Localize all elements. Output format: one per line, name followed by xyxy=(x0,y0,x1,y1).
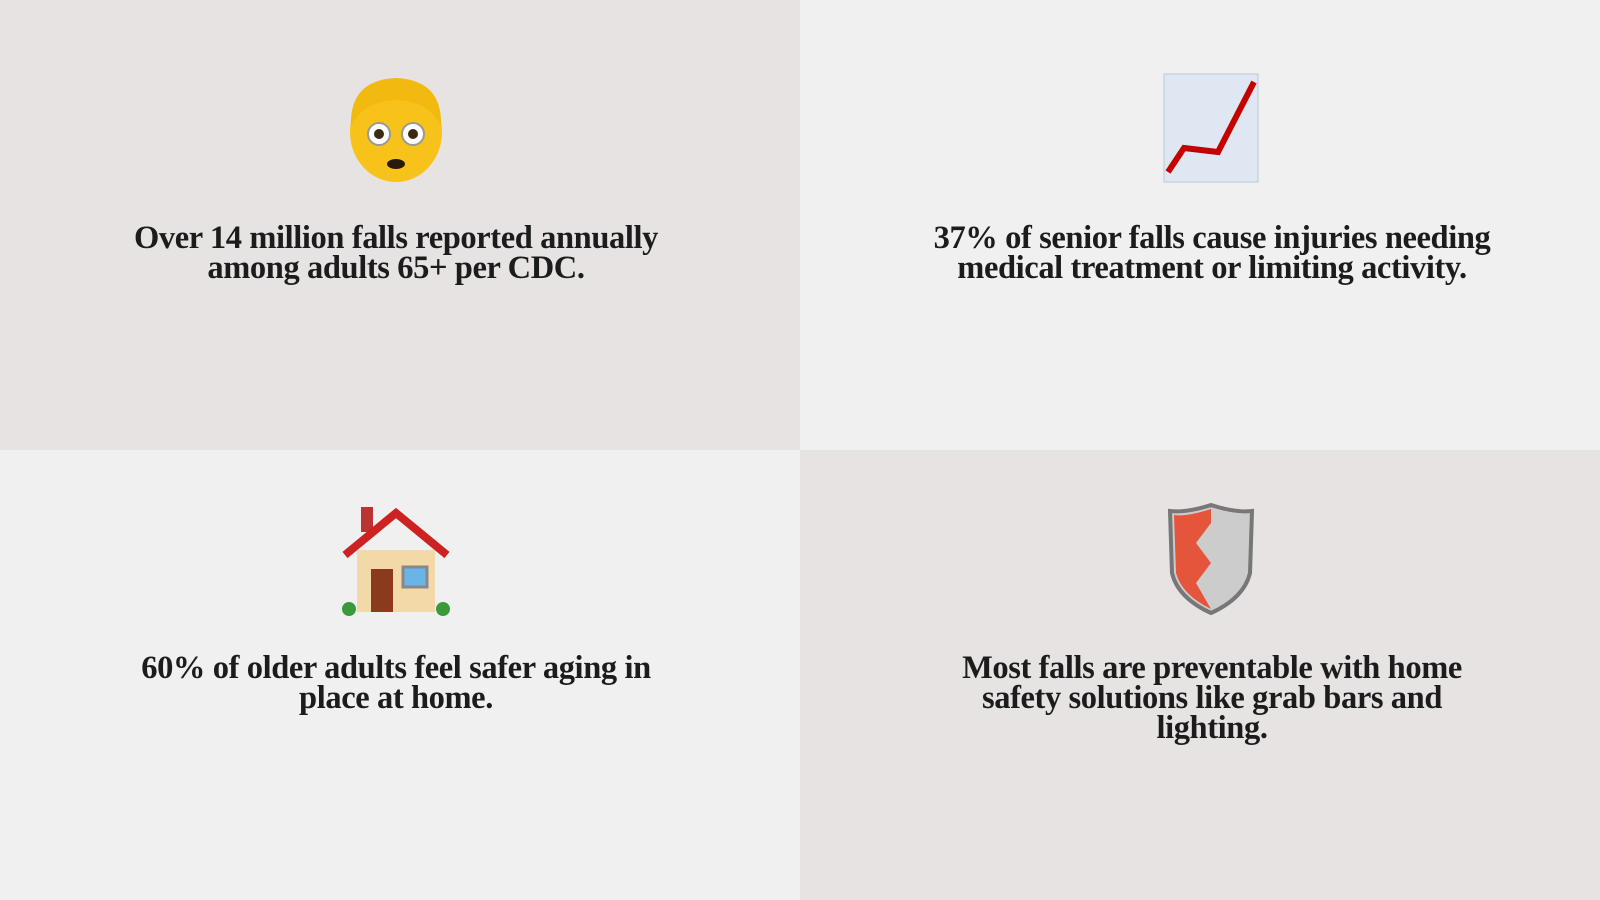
text: Most falls are preventable with home safety solutions like grab bars and lighting. xyxy=(962,650,1462,746)
panel: falls reported xyxy=(0,0,800,450)
panel: preventable xyxy=(800,450,1600,900)
icon: house xyxy=(342,507,450,616)
text: 60% of older adults feel safer aging in place at home. xyxy=(141,650,651,716)
text: Over 14 million falls reported annually among adults 65+ per CDC. xyxy=(134,220,658,286)
panel: aging at home xyxy=(0,450,800,900)
icon: shield xyxy=(1168,503,1254,615)
panel: injuries xyxy=(800,0,1600,450)
text: 37% of senior falls cause injuries needing medical treatment or limiting activity. xyxy=(934,220,1490,286)
icon: older person xyxy=(350,78,442,182)
icon: chart increasing xyxy=(1164,74,1258,182)
